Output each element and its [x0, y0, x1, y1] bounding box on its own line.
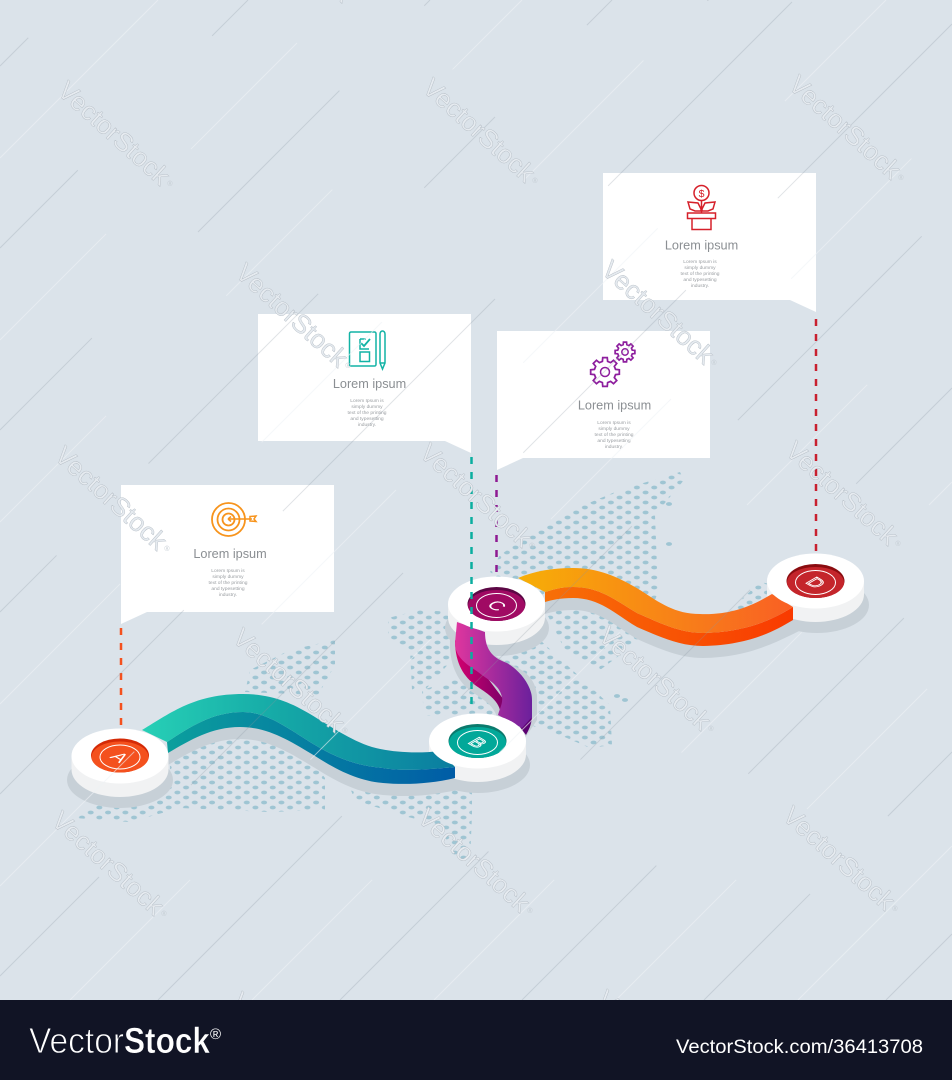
disc C top	[448, 576, 545, 632]
halftone world map	[78, 472, 767, 859]
card C: gears	[497, 331, 710, 470]
body text: simply dummy	[212, 574, 244, 580]
connector: D dashed line	[815, 319, 817, 553]
disc B top	[429, 714, 526, 768]
body text: Lorem Ipsum is	[350, 398, 384, 404]
dollar sign: $	[699, 188, 705, 200]
watermarks: ®	[529, 542, 535, 550]
icon: checklist and pencil	[350, 331, 385, 369]
body text	[681, 259, 720, 289]
body text: text of the printing	[209, 580, 248, 586]
footer logo: VectorStock	[29, 1020, 222, 1061]
body text: industry.	[605, 444, 623, 450]
connector: B dashed line	[470, 457, 473, 712]
watermarks: ®	[167, 180, 173, 188]
icon: money plant	[688, 186, 716, 230]
watermarks: ®	[527, 907, 533, 915]
watermarks: VectorStock	[780, 435, 905, 552]
body text: industry.	[358, 422, 376, 428]
watermarks: VectorStock	[49, 440, 174, 557]
body text: industry.	[691, 283, 709, 289]
ribbon: B to C	[455, 622, 532, 735]
ribbon: C to D	[518, 568, 793, 646]
card B: checklist	[258, 314, 471, 453]
icon: target with arrow	[212, 503, 256, 536]
body text: and typesetting	[597, 438, 631, 444]
body text	[595, 420, 634, 450]
connector: A dashed line	[120, 628, 122, 727]
body text: simply dummy	[598, 426, 630, 432]
icon: gears	[591, 342, 635, 386]
watermarks: ®	[898, 174, 904, 182]
card A: target	[121, 485, 334, 624]
shadows	[67, 577, 869, 808]
body text: simply dummy	[684, 265, 716, 271]
connector: C dashed line	[495, 475, 498, 575]
body text: and typesetting	[350, 416, 384, 422]
watermarks: VectorStock	[777, 800, 902, 917]
letter A: A	[106, 749, 133, 765]
body text: and typesetting	[211, 586, 245, 592]
disc C side	[448, 604, 545, 645]
watermarks: ®	[708, 725, 714, 733]
watermarks: VectorStock	[227, 622, 352, 739]
watermarks: VectorStock	[52, 75, 177, 192]
watermarks: VectorStock	[46, 805, 171, 922]
body text: industry.	[219, 592, 237, 598]
footer image id: VectorStock.com/36413708	[676, 1036, 923, 1058]
body text: text of the printing	[681, 271, 720, 277]
card D: money plant	[603, 173, 816, 312]
body text: and typesetting	[683, 277, 717, 283]
letter B: B	[464, 735, 491, 751]
watermarks: ®	[164, 545, 170, 553]
disc A	[72, 728, 168, 797]
disc D top	[767, 554, 864, 608]
letter C: C	[482, 598, 511, 614]
body text: text of the printing	[595, 432, 634, 438]
footer bar	[0, 1000, 952, 1080]
watermarks: ®	[161, 910, 167, 918]
watermarks: VectorStock	[593, 620, 718, 737]
heading: Lorem ipsum	[578, 398, 651, 412]
disc B side	[429, 741, 526, 782]
body text: Lorem Ipsum is	[683, 259, 717, 265]
watermarks: ®	[711, 359, 717, 367]
watermarks: VectorStock	[230, 257, 355, 374]
watermarks: VectorStock	[414, 437, 539, 554]
body text: simply dummy	[351, 404, 383, 410]
letter D: D	[801, 575, 830, 591]
watermarks: ®	[342, 727, 348, 735]
heading: Lorem ipsum	[333, 377, 406, 391]
body text: Lorem Ipsum is	[211, 568, 245, 574]
watermarks: ®	[532, 177, 538, 185]
heading: Lorem ipsum	[665, 238, 738, 252]
watermarks: VectorStock	[596, 254, 721, 371]
watermarks: ®	[895, 540, 901, 548]
body text: Lorem Ipsum is	[597, 420, 631, 426]
body text	[348, 398, 387, 428]
footer logo: ®	[210, 1026, 221, 1043]
heading: Lorem ipsum	[193, 547, 267, 561]
watermarks: ®	[345, 362, 351, 370]
disc D side	[767, 581, 864, 622]
ribbon: A to B	[142, 694, 455, 784]
body text	[209, 568, 248, 598]
watermarks: ®	[892, 905, 898, 913]
watermarks: VectorStock	[783, 69, 908, 186]
watermarks: VectorStock	[412, 802, 537, 919]
watermarks: VectorStock	[417, 72, 542, 189]
body text: text of the printing	[348, 410, 387, 416]
